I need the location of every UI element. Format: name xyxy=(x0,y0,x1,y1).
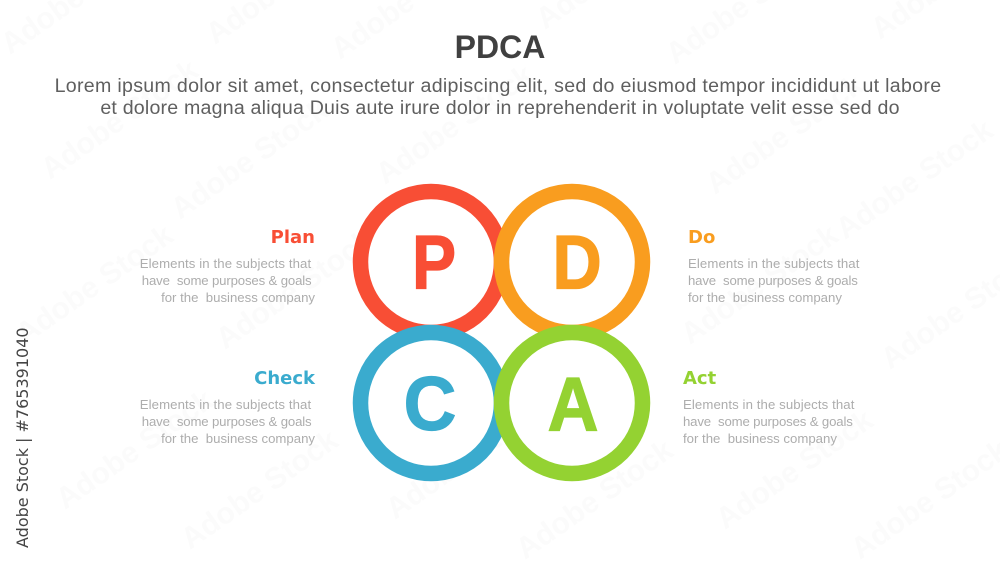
text: Plan description: for the business company xyxy=(161,290,315,305)
circle C: C xyxy=(404,362,456,446)
text: Adobe Stock xyxy=(35,53,204,186)
text: Do description: for the business company xyxy=(688,290,842,305)
label: Plan: Plan xyxy=(271,227,315,248)
text: Adobe Stock xyxy=(380,393,549,526)
label: Act: Act xyxy=(683,368,716,389)
text: Adobe Stock xyxy=(710,403,879,536)
text: Do description: Elements in the subjects that xyxy=(688,256,860,271)
vertical stock credit: Adobe Stock | #765391040 xyxy=(13,327,32,548)
text: Adobe Stock xyxy=(210,223,379,356)
text: Act description xyxy=(683,397,854,446)
text: Check description: have some purposes & goals xyxy=(142,414,311,429)
label: Check: Check xyxy=(254,368,315,389)
text: Check description xyxy=(140,397,315,446)
text: Check description: for the business company xyxy=(161,431,315,446)
subtitle text xyxy=(55,75,941,119)
subtitle text: et dolore magna aliqua Duis aute irure dolor in reprehenderit in voluptate velit esse sed do xyxy=(100,97,900,119)
circle D: D xyxy=(552,221,602,305)
text: Adobe Stock xyxy=(175,423,344,556)
subtitle text: Lorem ipsum dolor sit amet, consectetur adipiscing elit, sed do eiusmod tempor incididunt ut labore xyxy=(55,75,941,97)
text: Check description: Elements in the subjects that xyxy=(140,397,311,412)
text: Act description: have some purposes & goals xyxy=(683,414,853,429)
title: PDCA xyxy=(455,29,545,65)
text: Adobe Stock xyxy=(700,68,869,201)
circle C xyxy=(360,332,502,474)
text: Adobe Stock xyxy=(370,58,539,191)
text: Adobe Stock xyxy=(675,218,844,351)
text: Act description: for the business company xyxy=(683,431,837,446)
text: Adobe Stock xyxy=(10,218,179,351)
circle P xyxy=(360,192,502,332)
text: Adobe Stock xyxy=(830,113,999,246)
text: Adobe Stock xyxy=(50,383,219,516)
circle D xyxy=(502,192,642,332)
text: Plan description: have some purposes & goals xyxy=(142,273,311,288)
text: Act description: Elements in the subjects that xyxy=(683,397,854,412)
text: Do description xyxy=(688,256,860,305)
text: Do description: have some purposes & goals xyxy=(688,273,858,288)
circle P: P xyxy=(412,221,456,306)
PDCA overlapping circles diagram xyxy=(352,184,650,482)
text: Adobe Stock xyxy=(165,93,334,226)
circle A: A xyxy=(547,362,599,447)
text: Adobe Stock xyxy=(510,433,679,563)
circle A xyxy=(502,332,642,474)
text: Plan description: Elements in the subjects that xyxy=(140,256,311,271)
text: Plan description xyxy=(140,256,315,305)
label: Do: Do xyxy=(688,227,715,248)
